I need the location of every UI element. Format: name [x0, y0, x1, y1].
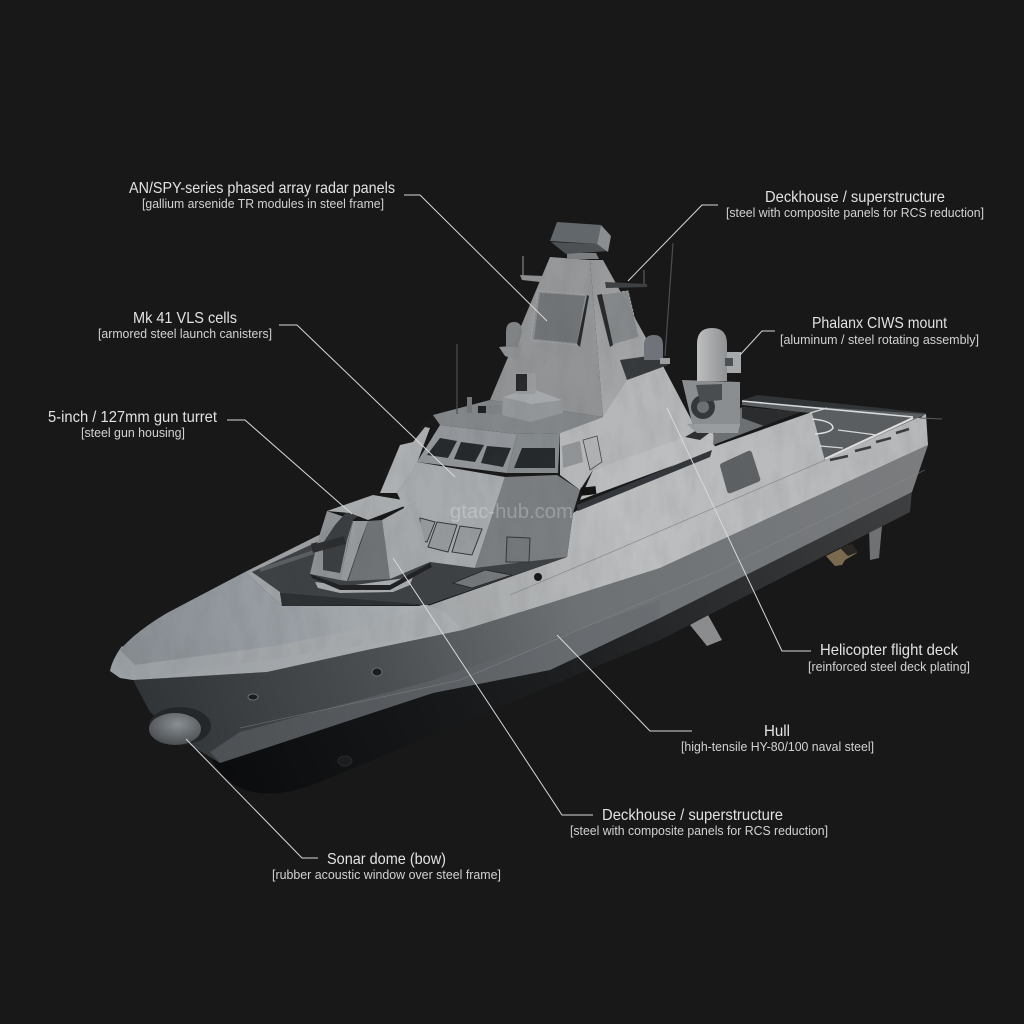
label: AN/SPY radar panels — [129, 180, 547, 321]
tower left face — [490, 257, 603, 417]
label: Mk 41 VLS cells: [armored steel launch canisters] — [98, 326, 272, 341]
rudder — [869, 526, 882, 560]
label: helicopter flight deck: [reinforced steel deck plating] — [808, 659, 970, 674]
illustration: stealth frigate — [100, 220, 942, 794]
label: deckhouse upper: [steel with composite panels for RCS reduction] — [726, 205, 984, 220]
aft tower facet — [560, 366, 713, 490]
bulb recess shadow — [149, 707, 211, 745]
flight deck — [742, 395, 927, 460]
steel mottling texture — [420, 370, 908, 632]
dark side stripe — [577, 450, 712, 511]
label: hull: Hull — [764, 723, 790, 740]
label: sonar dome: [rubber acoustic window over steel frame] — [272, 867, 501, 882]
top radar box — [550, 222, 611, 254]
bridge windows — [427, 438, 555, 468]
label: deckhouse lower — [393, 558, 828, 838]
hull side — [133, 445, 928, 763]
superstructure side wall — [425, 412, 928, 630]
stern safety nets — [830, 418, 942, 460]
sonar dome — [149, 713, 201, 745]
foredeck bulwark — [245, 572, 282, 606]
phased array panel right — [597, 291, 639, 347]
hull seam lines — [240, 470, 925, 728]
label: gun turret — [48, 409, 352, 514]
label: gun turret: [steel gun housing] — [81, 425, 185, 440]
mast yards and domes — [499, 256, 670, 380]
gun barrel — [260, 541, 345, 570]
side porthole — [534, 573, 542, 581]
bow lip — [110, 604, 463, 680]
forward bridge wing — [380, 427, 430, 493]
label: hull: [high-tensile HY-80/100 naval steel] — [681, 739, 874, 754]
deck hatch — [453, 570, 512, 588]
skeg fin — [690, 615, 722, 646]
foredeck recess — [252, 542, 567, 605]
gun turret — [310, 495, 432, 590]
label: hull — [557, 635, 874, 754]
deckhouse roof — [433, 400, 603, 434]
bow deck — [120, 572, 427, 665]
label: Mk 41 VLS cells: Mk 41 VLS cells — [133, 310, 237, 327]
mid-deck low block — [502, 388, 563, 422]
label: Phalanx CIWS: Phalanx CIWS mount — [812, 315, 947, 332]
label: gun turret: 5-inch / 127mm gun turret — [48, 409, 218, 426]
radar pedestal — [567, 253, 599, 259]
bridge side door — [562, 436, 602, 470]
small black fitting — [581, 486, 596, 496]
deckhouse light front face — [397, 462, 505, 568]
label: helicopter flight deck: Helicopter flight deck — [820, 642, 959, 659]
deckhouse dark front face — [475, 475, 580, 568]
propeller — [826, 544, 858, 566]
keel: dark underbody — [212, 490, 912, 794]
label: Mk 41 VLS cells — [98, 310, 455, 477]
phased array panel left — [531, 291, 589, 347]
label: sonar dome: Sonar dome (bow) — [327, 851, 446, 868]
label: AN/SPY radar panels: AN/SPY-series phased array radar panels — [129, 180, 395, 197]
label: AN/SPY radar panels: [gallium arsenide TR modules in steel frame] — [142, 196, 384, 211]
gun turret base — [315, 577, 413, 593]
label: sonar dome — [186, 739, 501, 882]
bridge optic — [516, 373, 536, 394]
antennas — [457, 243, 673, 414]
label: deckhouse upper — [628, 189, 984, 281]
tower right face — [590, 260, 693, 423]
side window — [720, 451, 760, 493]
stealth block above stripe — [580, 430, 715, 500]
portholes — [248, 668, 382, 766]
VLS hatches — [419, 518, 530, 562]
label: helicopter flight deck — [667, 408, 970, 674]
label: deckhouse lower: [steel with composite panels for RCS reduction] — [570, 823, 828, 838]
watermark: gtac-hub.com — [450, 501, 573, 523]
label: Phalanx CIWS — [740, 315, 979, 355]
bridge window band — [417, 425, 517, 473]
label: deckhouse lower: Deckhouse / superstructure — [602, 807, 783, 824]
navigation sensor — [467, 397, 502, 426]
lower hull strake — [210, 600, 660, 763]
label: deckhouse upper: Deckhouse / superstructure — [765, 189, 945, 206]
label: Phalanx CIWS: [aluminum / steel rotating assembly] — [780, 332, 979, 347]
hangar roof deck — [713, 407, 800, 445]
CIWS mount — [682, 328, 741, 433]
foredeck lip strip — [245, 530, 330, 572]
side seam — [510, 458, 830, 595]
